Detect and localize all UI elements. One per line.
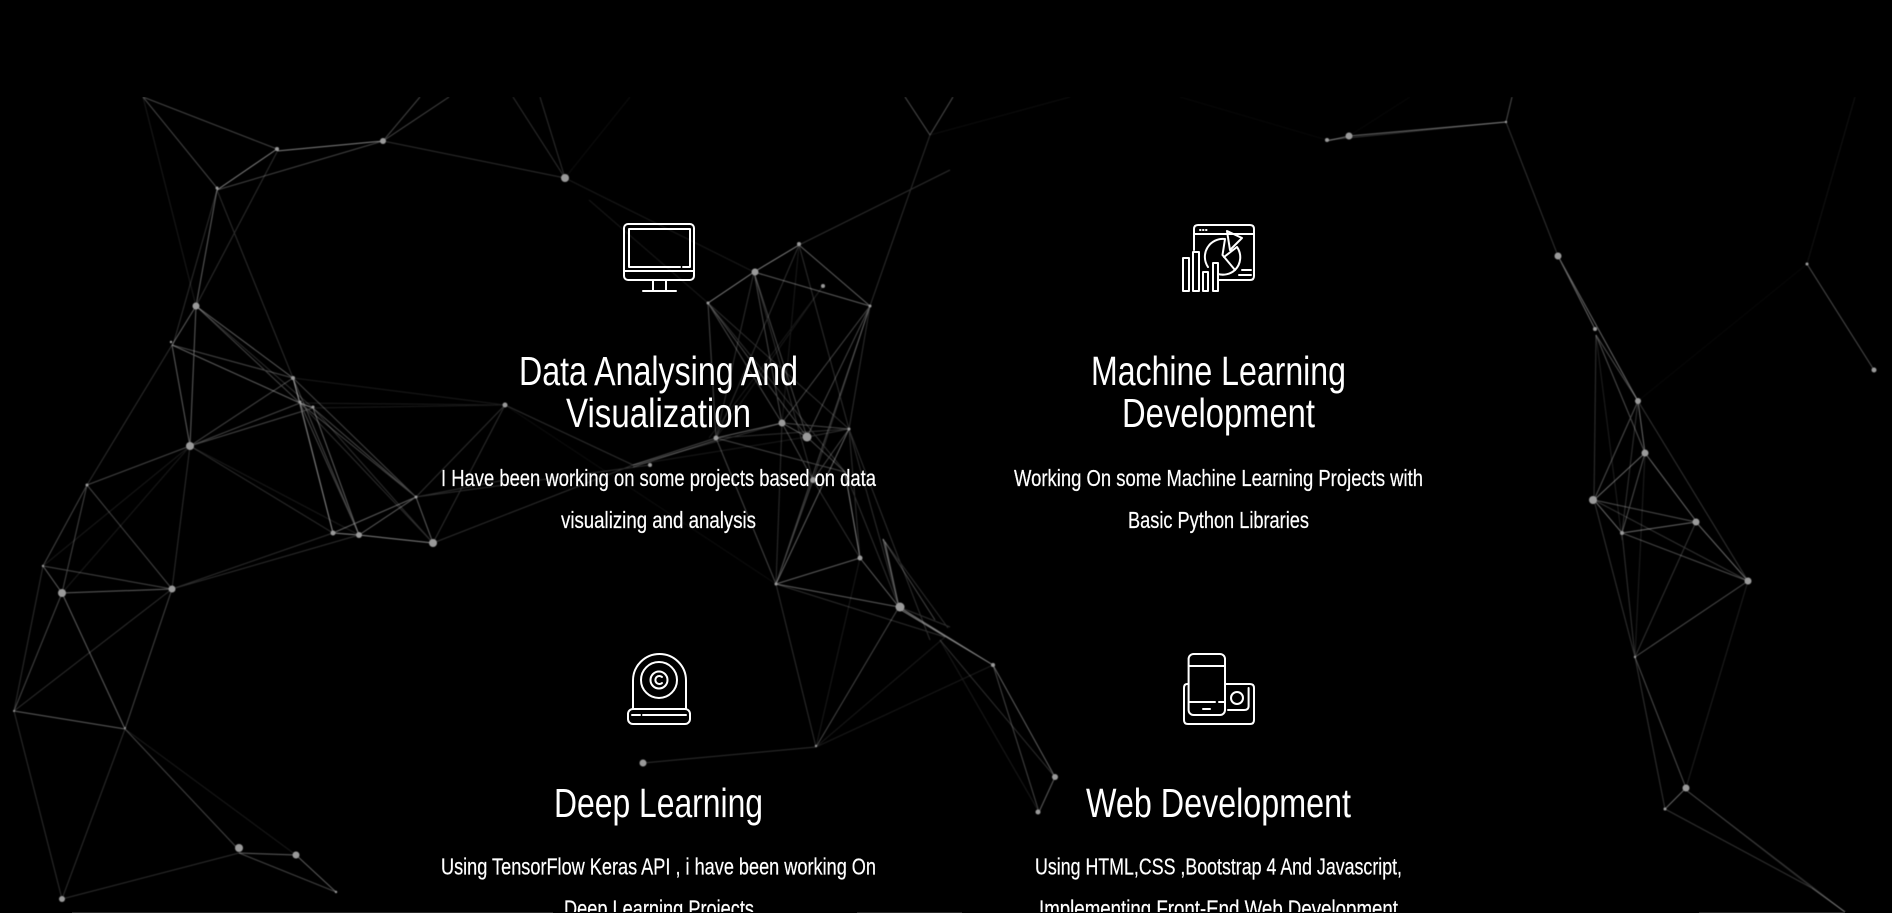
particle network: right cluster	[1180, 97, 1876, 912]
icon: dashboard with pie and bar charts	[1183, 225, 1254, 291]
heading: web development: Web Development	[1086, 780, 1351, 826]
icon: desktop monitor	[624, 224, 694, 291]
icon: phone on dock	[1184, 654, 1254, 724]
panel: data analysing and visualization	[441, 224, 876, 533]
panel: web development	[1035, 654, 1402, 913]
heading: data analysing and visualization: Data Analysing And	[519, 348, 798, 394]
text: web development description: Using HTML,CSS ,Bootstrap 4 And Javascript,	[1035, 854, 1402, 880]
text: machine learning description: Basic Python Libraries	[1128, 507, 1309, 533]
heading: machine learning development: Machine Learning	[1091, 348, 1346, 394]
particle network: left cluster	[13, 97, 650, 902]
text: data analysing description: I Have been working on some projects based on data	[441, 465, 876, 491]
icon: webcam	[628, 654, 690, 724]
text: machine learning description: Working On some Machine Learning Projects with	[1014, 465, 1423, 491]
particle network: centre cluster	[502, 97, 1070, 814]
heading: machine learning development: Development	[1122, 390, 1315, 436]
heading: deep learning: Deep Learning	[554, 780, 763, 826]
heading: data analysing and visualization: Visualization	[566, 390, 751, 436]
text: deep learning description: Using TensorFlow Keras API , i have been working On	[441, 854, 876, 880]
text: data analysing description: visualizing and analysis	[561, 507, 756, 533]
service cards	[441, 224, 1423, 913]
panel: machine learning development	[1014, 225, 1423, 533]
panel: deep learning	[441, 654, 876, 913]
